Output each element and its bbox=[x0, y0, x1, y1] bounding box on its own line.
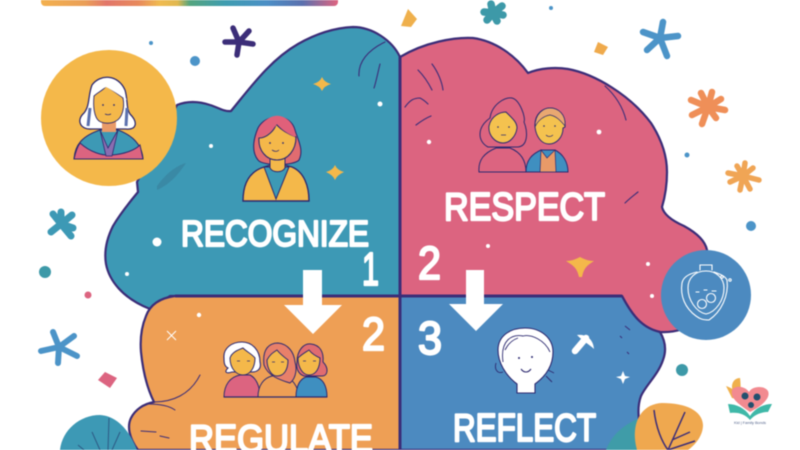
leaf: bottom right orange bbox=[635, 403, 703, 450]
star: blue left bbox=[41, 332, 77, 363]
heading: reflect: REFLECT bbox=[453, 407, 596, 450]
rainbow bar bbox=[41, 0, 338, 6]
arrow: recognize to regulate bbox=[284, 270, 342, 334]
panel: recognize bbox=[105, 27, 400, 309]
icon: recognize person bbox=[243, 116, 309, 201]
panel: respect bbox=[400, 38, 707, 332]
icon: respect people bbox=[479, 98, 568, 172]
star: dark purple bbox=[225, 28, 253, 55]
star: teal top bbox=[484, 4, 503, 21]
diamonds bbox=[401, 9, 417, 27]
logo bbox=[726, 378, 772, 425]
blue circle with shield icon bbox=[661, 250, 751, 340]
leaf: bottom left teal bbox=[60, 415, 137, 450]
number 2 respect: 2 bbox=[418, 237, 441, 289]
number 2 regulate: 2 bbox=[362, 308, 385, 360]
star: teal left bbox=[51, 212, 73, 236]
number 3: 3 bbox=[418, 312, 442, 364]
panel: regulate bbox=[129, 296, 400, 450]
leaf: bottom right teal bbox=[606, 418, 650, 450]
icon: small tool bbox=[575, 335, 594, 351]
panel: reflect bbox=[400, 296, 665, 450]
yellow sparkles bbox=[313, 77, 594, 277]
divider line bbox=[175, 57, 622, 450]
icon: reflect face bbox=[495, 328, 554, 393]
arrow: respect to reflect bbox=[449, 270, 503, 331]
star: orange bbox=[691, 92, 725, 124]
star: light orange bbox=[728, 163, 759, 190]
yellow circle with woman bbox=[41, 50, 177, 186]
number 1: 1 bbox=[362, 243, 379, 295]
heading: respect: RESPECT bbox=[444, 186, 605, 229]
coloured dots bbox=[149, 6, 756, 231]
white dots bbox=[125, 102, 654, 317]
white sparkles bbox=[167, 331, 176, 340]
decorative stars and shapes bbox=[39, 4, 759, 388]
logo: Kid | Family Bonds bbox=[734, 420, 766, 425]
heading: recognize: RECOGNIZE bbox=[181, 213, 369, 254]
icon: regulate group bbox=[224, 342, 327, 397]
star: blue top bbox=[643, 22, 678, 56]
